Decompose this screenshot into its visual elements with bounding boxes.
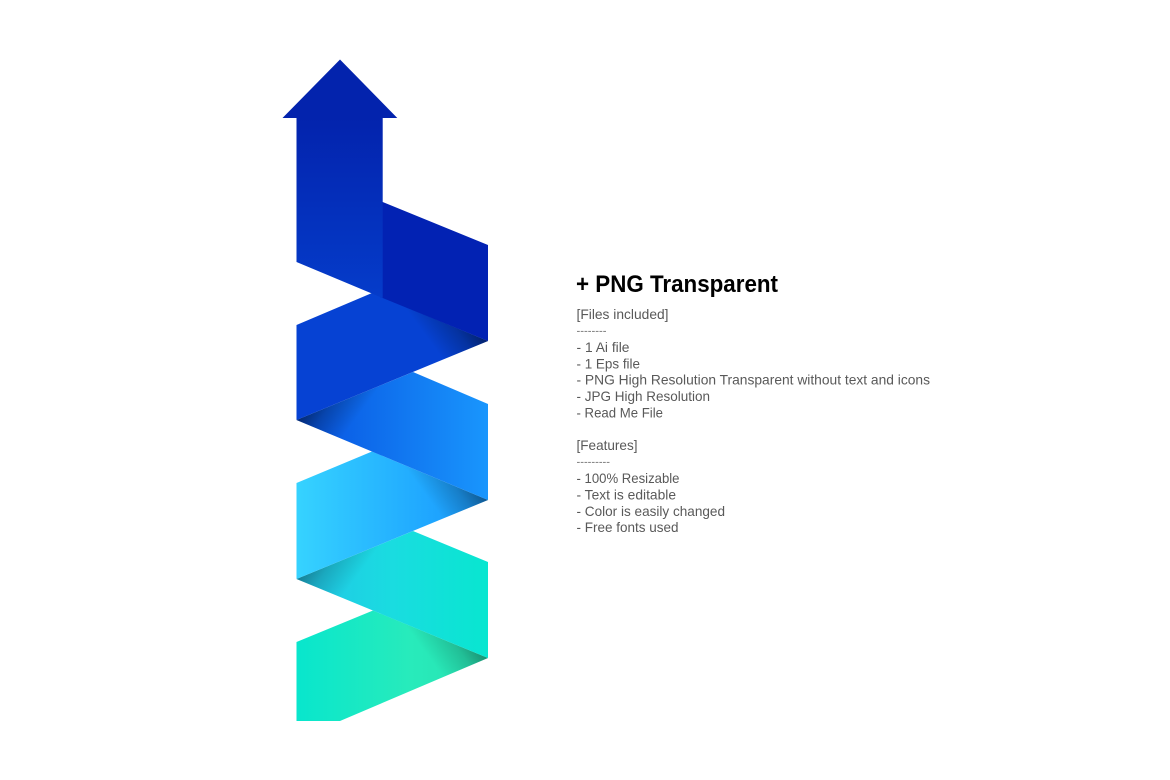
ribbon band 1: dark blue side panel	[380, 202, 488, 341]
ribbon band 2: royal blue	[296, 293, 488, 420]
text block: features: [Features]	[576, 437, 638, 453]
text block: features: ---------	[576, 453, 610, 469]
text block: features: - Free fonts used	[576, 519, 678, 535]
ribbon band 5: teal	[296, 531, 488, 658]
text block: files included: [Files included]	[576, 306, 668, 322]
text block: features: - Text is editable	[576, 486, 676, 502]
title: + PNG Transparent	[576, 271, 778, 298]
text block: files included: - Read Me File	[576, 404, 663, 420]
text block: files included: - JPG High Resolution	[576, 388, 710, 404]
text block: features: - 100% Resizable	[576, 470, 680, 486]
text block: files included: - 1 Ai file	[576, 339, 630, 355]
text block: features: - Color is easily changed	[576, 503, 725, 519]
arrow head and shaft	[282, 60, 397, 298]
text block: files included: - PNG High Resolution Transparent without text and icons	[576, 372, 930, 388]
ribbon band 6: green base	[296, 610, 488, 721]
text block: files included	[576, 306, 930, 420]
text block: files included: - 1 Eps file	[576, 355, 640, 371]
text block: features	[576, 437, 725, 535]
text block: files included: --------	[576, 322, 607, 338]
ribbon band 4: light blue	[296, 452, 488, 579]
ribbon band 3: blue	[296, 372, 488, 500]
zigzag arrow	[282, 60, 488, 721]
